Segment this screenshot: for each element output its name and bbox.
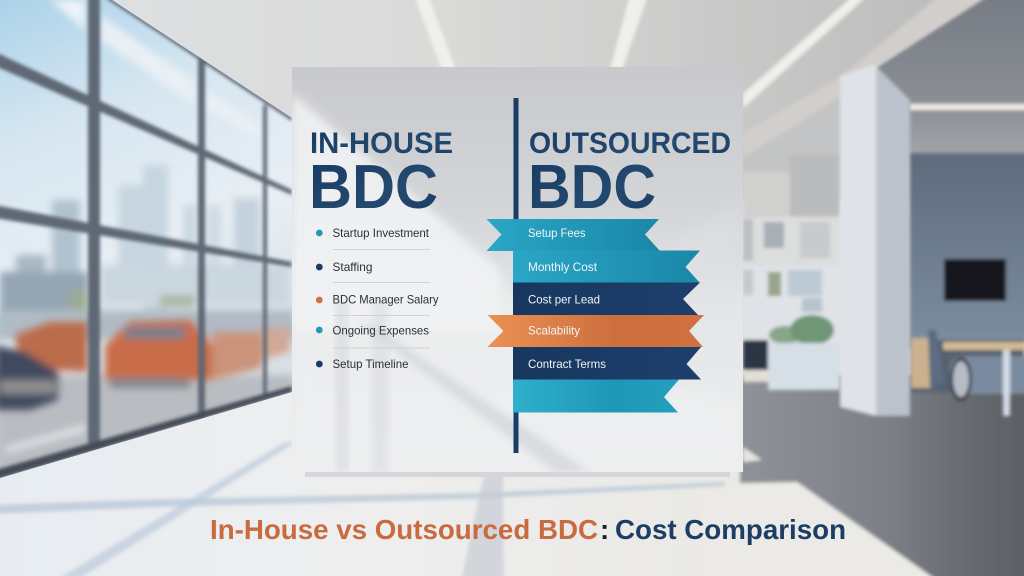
heading: Outsourced BDC: BDC xyxy=(528,153,656,222)
ribbon: Scalability: Scalability xyxy=(528,324,580,338)
title xyxy=(210,514,846,545)
structural pillar xyxy=(840,64,910,416)
heading: In-House BDC: BDC xyxy=(309,153,438,222)
ribbon: Contract Terms: Contract Terms xyxy=(528,357,606,371)
heading: Outsourced BDC: OUTSOURCED xyxy=(529,127,731,160)
heading: Outsourced BDC xyxy=(528,127,731,222)
title: Cost Comparison xyxy=(615,514,846,545)
ribbon: Monthly Cost: Monthly Cost xyxy=(528,260,598,274)
list item: Ongoing Expenses: Ongoing Expenses xyxy=(332,324,429,338)
ceiling xyxy=(0,0,1024,200)
ribbons: outsourced cost factors xyxy=(486,219,704,412)
list item: BDC Manager Salary: BDC Manager Salary xyxy=(332,292,438,306)
window mullions xyxy=(0,0,292,480)
left window with city and cars xyxy=(0,0,295,485)
list item: Startup Investment: Startup Investment xyxy=(332,226,430,240)
panel: comparison board xyxy=(292,67,743,477)
board sunlight and shadows xyxy=(292,94,582,472)
ceiling beams xyxy=(743,0,990,158)
floor xyxy=(0,375,1024,576)
ribbon: Scalability xyxy=(488,315,704,347)
list: in-house cost factors xyxy=(316,226,438,371)
heading: In-House BDC: IN-HOUSE xyxy=(310,127,453,160)
ribbon: blank teal xyxy=(513,380,679,412)
ribbon: Cost per Lead: Cost per Lead xyxy=(528,292,600,306)
title: In-House vs Outsourced BDC xyxy=(210,514,598,545)
ribbon: Cost per Lead xyxy=(513,282,700,315)
ribbon: Monthly Cost xyxy=(513,250,700,283)
list item: Setup Timeline: Setup Timeline xyxy=(332,357,409,371)
board base shadow xyxy=(305,471,730,477)
heading: In-House BDC xyxy=(309,127,453,222)
list item: Staffing: Staffing xyxy=(332,260,372,274)
title: : xyxy=(600,514,609,545)
ribbon: Setup Fees xyxy=(486,219,660,251)
ribbon: Contract Terms xyxy=(513,347,701,380)
board surface xyxy=(292,67,743,472)
ribbon: Setup Fees: Setup Fees xyxy=(528,226,586,240)
right room: wall, TV, desk and car xyxy=(876,0,1024,416)
middle room behind panel xyxy=(743,97,840,390)
center divider line xyxy=(514,98,518,453)
